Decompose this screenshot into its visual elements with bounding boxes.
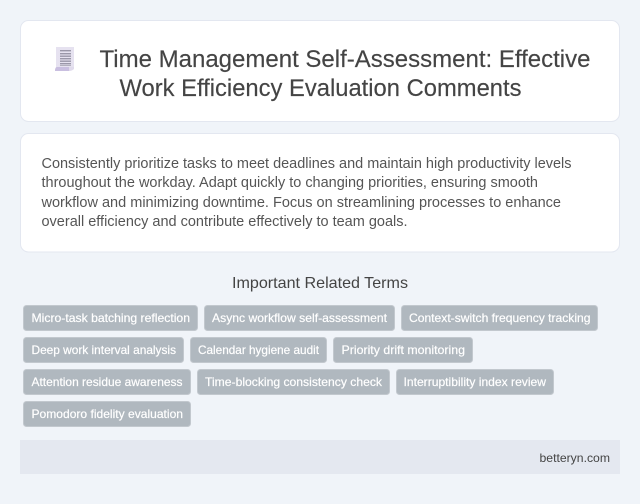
tag: Context-switch frequency tracking: [409, 311, 590, 325]
tag: Async workflow self-assessment: [212, 311, 388, 325]
description text: throughout the workday. Adapt quickly to changing priorities, ensuring smooth: [42, 175, 538, 191]
description text: workflow and minimizing downtime. Focus on streamlining processes to enhance: [40, 195, 561, 211]
tag: [396, 370, 554, 394]
footer text: site name: betteryn.com: [540, 451, 610, 465]
tag list: [24, 306, 598, 426]
icon: document scroll: [55, 47, 74, 71]
tag: [198, 370, 390, 394]
heading: related terms: Important Related Terms: [232, 275, 408, 292]
title: Work Efficiency Evaluation Comments: [120, 75, 522, 102]
title: [100, 46, 590, 102]
tag: Time-blocking consistency check: [205, 375, 383, 389]
tag: Micro-task batching reflection: [32, 311, 190, 325]
tag: [24, 402, 190, 426]
tag: [190, 338, 326, 362]
title: Time Management Self-Assessment: Effective: [100, 46, 590, 73]
description text: [40, 156, 572, 230]
tag: [24, 306, 198, 330]
tag: Attention residue awareness: [32, 375, 182, 389]
tag: Priority drift monitoring: [342, 343, 465, 357]
description text: overall efficiency and contribute effectively to team goals.: [42, 214, 408, 230]
tag: [24, 338, 184, 362]
tag: [24, 370, 190, 394]
tag: Interruptibility index review: [404, 375, 546, 389]
tag: [334, 338, 472, 362]
footer bar: [20, 440, 620, 474]
panel: description card: [20, 134, 620, 252]
tag: Calendar hygiene audit: [198, 343, 320, 357]
description text: Consistently prioritize tasks to meet deadlines and maintain high productivity levels: [42, 156, 572, 172]
tag: Pomodoro fidelity evaluation: [32, 407, 183, 421]
tag: [204, 306, 394, 330]
tag: Deep work interval analysis: [32, 343, 176, 357]
tag: [402, 306, 598, 330]
panel: title card: [20, 20, 620, 122]
